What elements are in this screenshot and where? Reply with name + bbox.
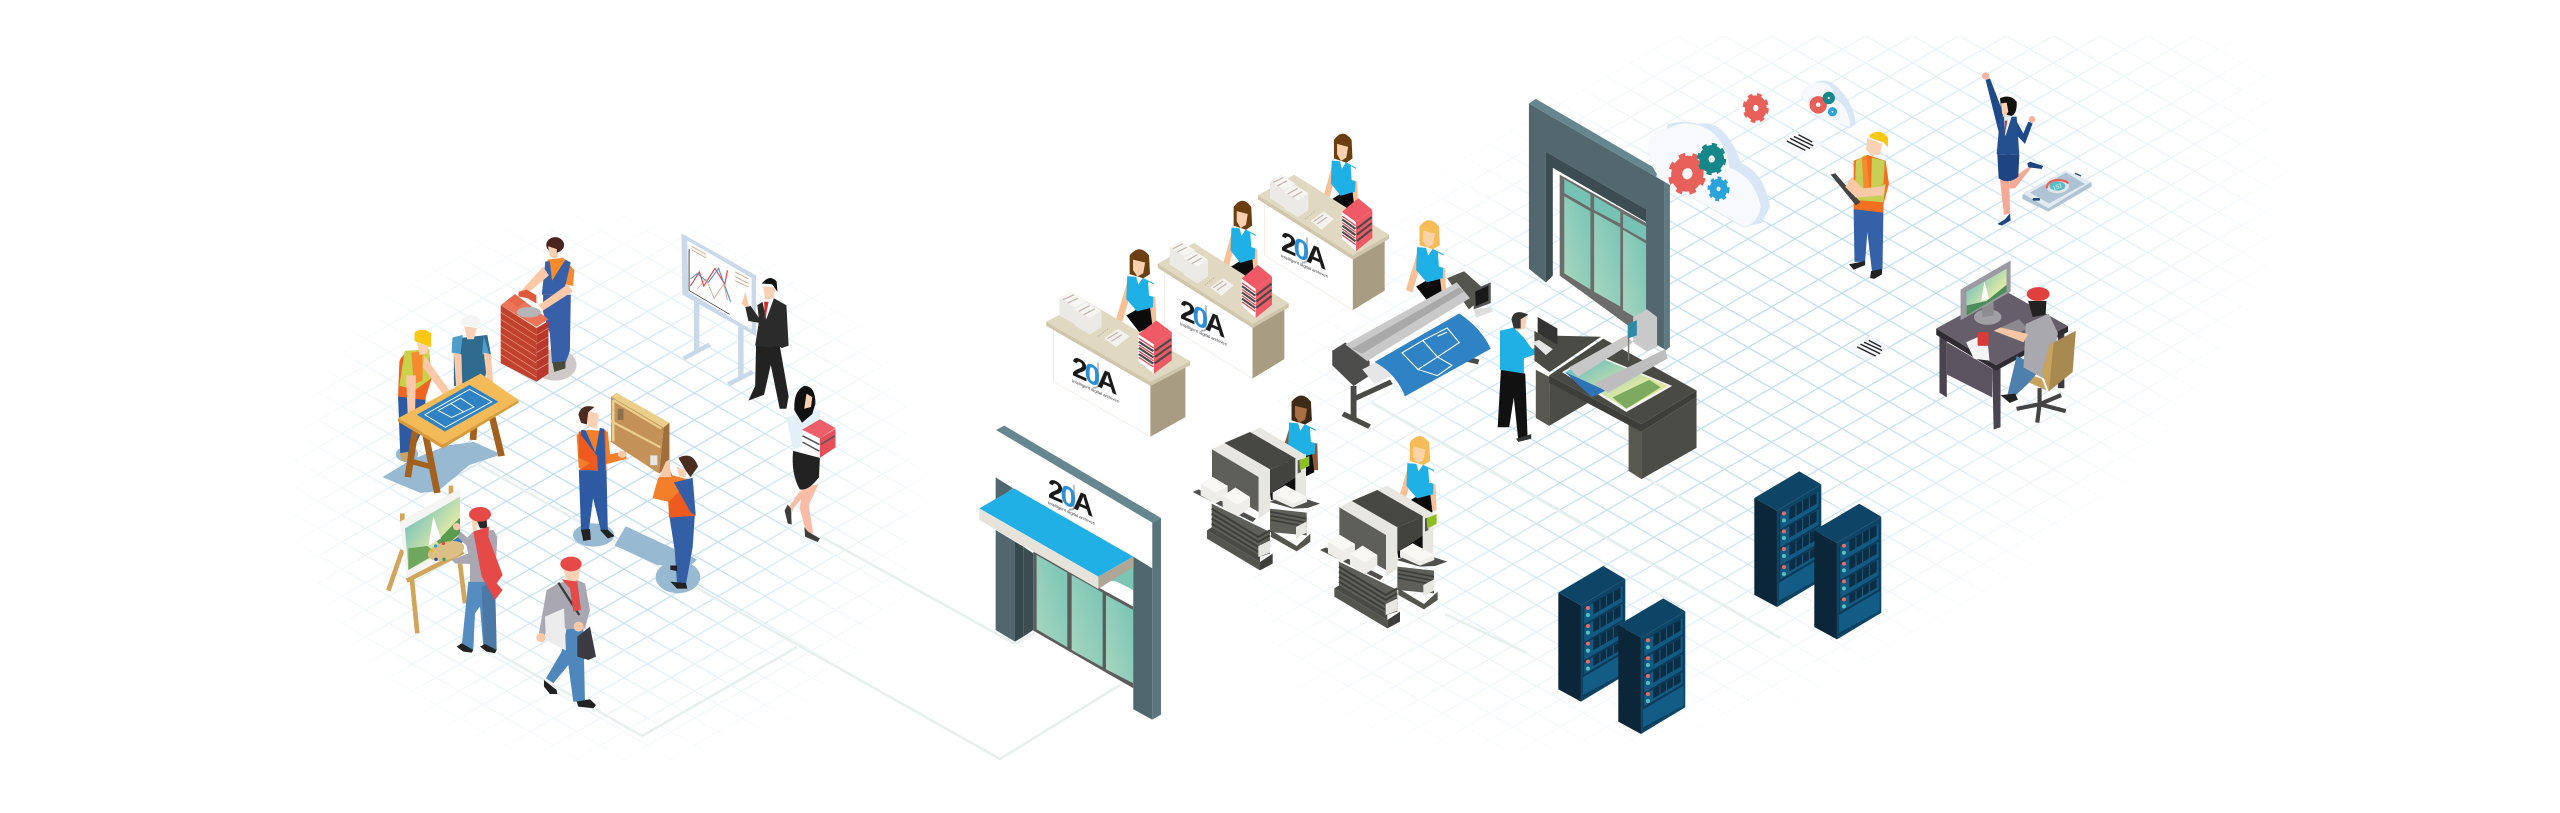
table top (1549, 339, 1697, 424)
chart (689, 246, 748, 314)
logo: shop sign: Intelligent digital archives (1048, 500, 1096, 526)
document scanner 2 (1320, 486, 1447, 628)
palette (426, 537, 466, 565)
desk legs and modesty panel (1939, 328, 2064, 430)
large glazed building entrance (1529, 99, 1670, 351)
board frame (681, 233, 756, 336)
reception clerk 2 (1221, 201, 1258, 284)
workstation return (1534, 331, 1601, 372)
smartphone with gauge (2022, 171, 2092, 212)
blue gear (1709, 178, 1728, 200)
man operating flatbed (1498, 312, 1544, 442)
cloud with gears (1648, 122, 1770, 227)
output tray (1362, 362, 1391, 384)
monitor (1538, 317, 1557, 345)
table top (398, 374, 519, 445)
painter body (452, 507, 503, 653)
smartphone with gauge: 152 (2052, 183, 2063, 192)
designer (1994, 287, 2058, 403)
platform outlines (447, 403, 1780, 759)
red gear (1666, 151, 1709, 197)
window panes (1560, 175, 1646, 339)
desk top (1936, 291, 2068, 365)
figure: businessman (742, 278, 789, 409)
side monitor (1473, 282, 1491, 309)
figure: graphic designer at desk (1936, 261, 2076, 430)
wide-format plotter (1332, 271, 1493, 427)
gantry (1569, 309, 1668, 393)
worker (521, 237, 574, 372)
cloud body (1648, 122, 1770, 227)
small red gear (1744, 95, 1767, 121)
reception desk 3 (1258, 175, 1389, 310)
body (1345, 282, 1470, 361)
floor grid: right platform (1270, 36, 2251, 726)
flatbed cutting table (1532, 309, 1697, 479)
figure: presentation whiteboard (681, 233, 756, 384)
loose bricks and mortar (519, 289, 536, 303)
server rack pair A (1558, 566, 1685, 734)
end caps (1332, 342, 1370, 386)
document icon lower (1847, 335, 1890, 361)
glass doors (1033, 552, 1133, 688)
monitor (1961, 261, 2011, 325)
chair back (2042, 331, 2076, 391)
figure: bricklayer and wall (501, 237, 577, 382)
mover right (652, 456, 698, 589)
document scanner 1 (1193, 428, 1320, 570)
stand (684, 300, 753, 384)
worker in white hard hat (452, 315, 494, 400)
left column (996, 477, 1033, 642)
document icon upper (1780, 131, 1824, 156)
stand (1343, 359, 1479, 427)
worker in hi-vis vest (398, 330, 454, 461)
mover left (577, 406, 627, 541)
wall shadow (534, 349, 577, 381)
logo: desk 1: Intelligent digital archives (1072, 378, 1120, 404)
crate (611, 393, 669, 474)
logo: desk 1: 20A (1072, 350, 1117, 402)
floor grid: left platform (315, 234, 905, 746)
floor shadows (573, 523, 700, 593)
reception desk 2 (1158, 241, 1289, 379)
blueprint sheet (1374, 313, 1491, 396)
table legs (408, 416, 502, 493)
teal gear (1699, 145, 1725, 173)
reception desk 1 (1046, 292, 1190, 437)
logo: desk 2: 20A (1180, 293, 1225, 345)
figure: woman carrying binders (785, 386, 836, 542)
binders (802, 419, 836, 458)
logo: desk 3: 20A (1281, 225, 1326, 277)
keyboard (1532, 340, 1553, 355)
easel (388, 486, 465, 633)
small cloud with gears (1800, 81, 1856, 129)
wall frame (1529, 103, 1664, 349)
figure: painter at easel (388, 486, 503, 653)
top strip (996, 426, 1161, 523)
figure: site engineer with tablet (1831, 132, 1889, 279)
brick wall (501, 305, 536, 382)
printed image on bed (1562, 354, 1672, 412)
awning (979, 488, 1133, 589)
legs and pedestal (1536, 370, 1549, 426)
chair base and seat (2017, 370, 2066, 423)
figure: two movers with crate (573, 393, 700, 593)
right column (1133, 518, 1161, 720)
clerk at document scanner 1 (1278, 396, 1318, 478)
logo: shop sign: 20A (1048, 472, 1093, 524)
blonde operator behind plotter (1406, 220, 1446, 303)
figure: celebrating businesswoman (1982, 72, 2043, 226)
clerk at document scanner 2 (1396, 436, 1436, 519)
reception clerk 1 (1116, 249, 1156, 332)
server rack pair B (1754, 471, 1881, 639)
logo: desk 3: Intelligent digital archives (1281, 253, 1329, 279)
canvas (400, 488, 463, 578)
figure: architects at blueprint table (382, 315, 519, 493)
figure: walking man with portfolio (536, 557, 596, 708)
table shadow (382, 442, 502, 493)
figure: shop entrance with awning (979, 426, 1161, 720)
paper and mug (1966, 332, 1990, 361)
reception clerk 3 (1322, 134, 1358, 216)
logo: desk 2: Intelligent digital archives (1180, 321, 1228, 347)
blueprint (417, 385, 498, 432)
